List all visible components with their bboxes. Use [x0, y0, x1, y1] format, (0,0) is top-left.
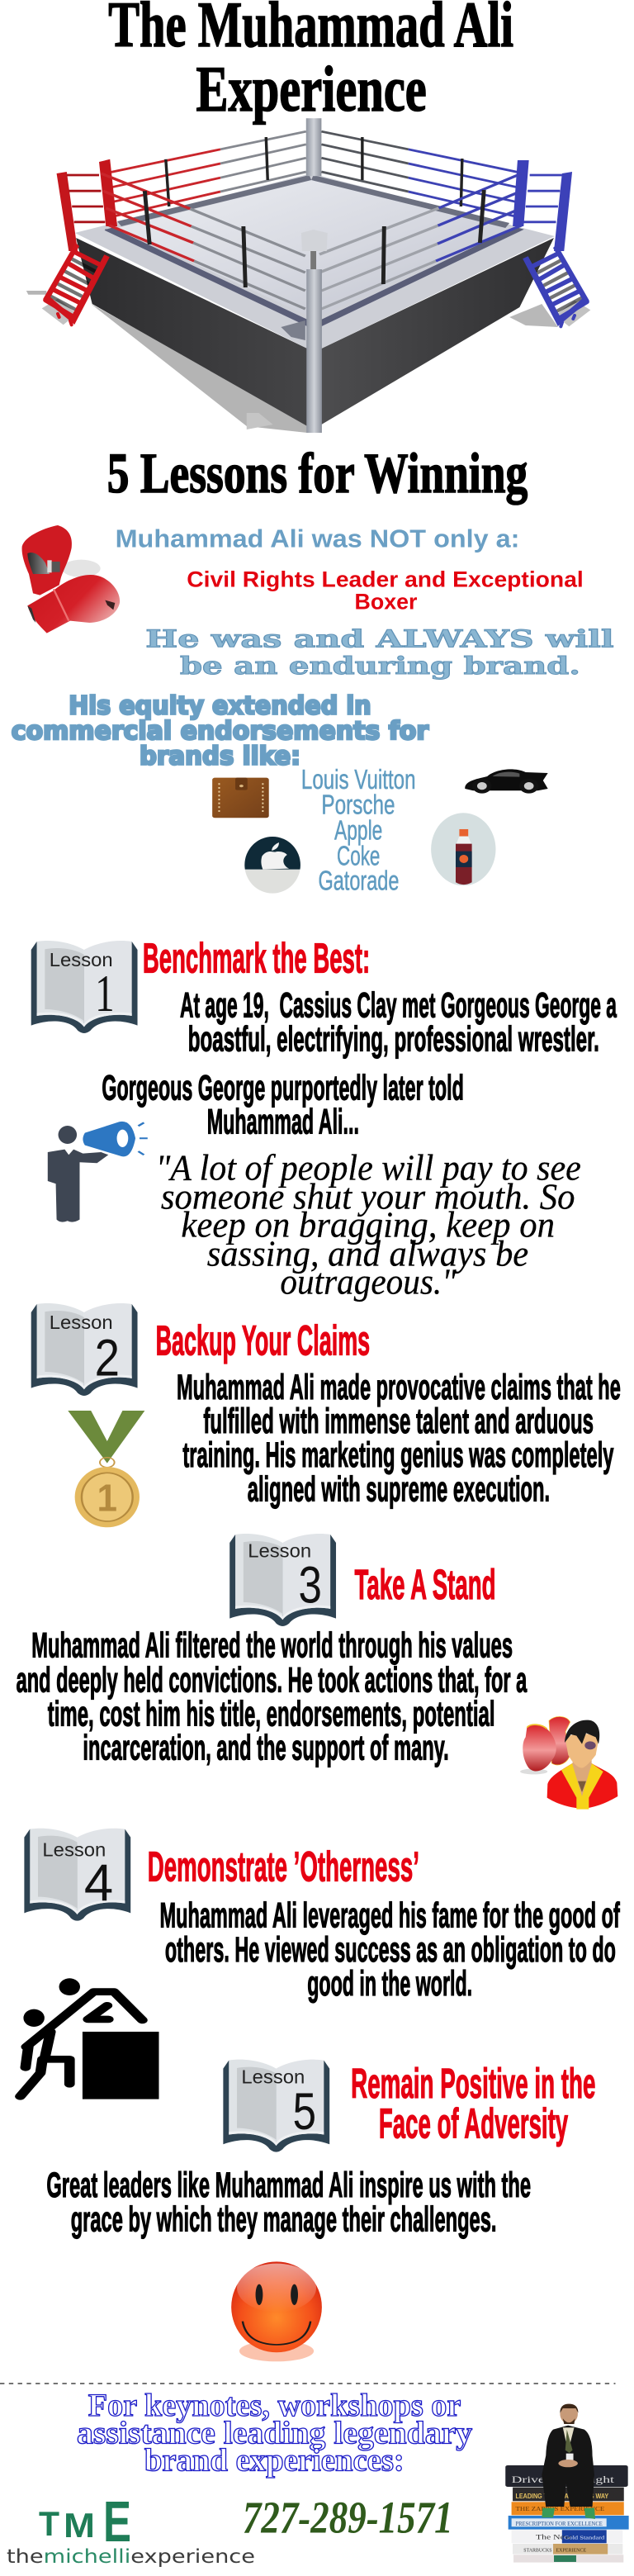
- logo: the michelli experience: the michelli experience: [7, 2546, 255, 2568]
- logo: the michelli experience: [7, 2489, 255, 2568]
- quote: [156, 1147, 581, 1302]
- text: equity: commercial endorsements for: [12, 716, 429, 745]
- icon: wallet: [212, 778, 269, 818]
- icon: lesson 1 book: 1: [95, 965, 115, 1022]
- front post: [301, 230, 328, 251]
- illustration: boxing ring: [26, 118, 572, 433]
- icon: cola bottle: [431, 813, 495, 885]
- text: enduring brand: He was and ALWAYS will: [145, 625, 614, 652]
- icon: lesson 5 book: Lesson: [241, 2066, 305, 2088]
- section: lesson 1: [31, 935, 617, 1396]
- text: lead-in: [102, 1068, 464, 1141]
- icon: gold medal: 1: [97, 1477, 117, 1520]
- text: call to action: brand experiences:: [144, 2442, 405, 2478]
- photo: author on book stack: Gold Standard: [564, 2535, 605, 2540]
- icon: lesson 3 book: [229, 1534, 336, 1626]
- text: lesson 5: [46, 2166, 531, 2239]
- icon: gold medal: [68, 1411, 144, 1527]
- quote: outrageous.": [280, 1262, 457, 1302]
- photo: author on book stack: Driven to Delight: [512, 2474, 615, 2485]
- icon: lesson 1 book: [31, 941, 138, 1033]
- icon: apple: [244, 837, 300, 894]
- logo: the michelli experience: T: [39, 2504, 59, 2543]
- photo: author on book stack: STARBUCKS: [523, 2547, 552, 2553]
- list: brands: Porsche: [321, 789, 395, 820]
- text: enduring brand: be an enduring brand.: [180, 652, 580, 680]
- text: call to action: [77, 2387, 472, 2478]
- phone number: 727-289-1571: [243, 2492, 453, 2543]
- icon: lesson 4 book: Lesson: [42, 1839, 106, 1861]
- photo: author on book stack: [505, 2404, 629, 2563]
- text: civil rights leader: Boxer: [355, 590, 417, 614]
- text: civil rights leader: [187, 568, 584, 614]
- corner posts: [57, 172, 78, 251]
- icon: lesson 2 book: Lesson: [50, 1312, 113, 1334]
- section: closing and contact: [0, 2166, 629, 2563]
- icon: boxing gloves: [22, 525, 120, 633]
- icon: red steps: [42, 244, 109, 325]
- text: lead-in: Muhammad Ali...: [207, 1102, 359, 1141]
- heading: remain positive: [351, 2061, 595, 2147]
- front ropes: [101, 173, 522, 309]
- text: lesson 4: [159, 1895, 620, 2004]
- icon: lesson 4 book: 4: [84, 1853, 113, 1912]
- icon: blue steps: [523, 245, 590, 326]
- photo: author on book stack: The New: [536, 2534, 572, 2541]
- back ropes: [111, 131, 518, 216]
- text: equity: [12, 690, 429, 771]
- section: title and boxing ring: [26, 0, 590, 505]
- icon: lesson 3 book: Lesson: [248, 1541, 311, 1562]
- ring apron and canvas: [75, 173, 555, 349]
- list: brands: Gatorade: [318, 865, 399, 895]
- back post: [306, 118, 321, 176]
- icon: smiley: [231, 2261, 322, 2361]
- text: lesson 2: [177, 1368, 621, 1509]
- icon: boxer: [520, 1716, 617, 1810]
- text: lesson 1 story: [180, 985, 617, 1059]
- text: lesson 3: [17, 1625, 528, 1767]
- icon: lesson 5 book: 5: [293, 2082, 316, 2140]
- section: lesson 4 and 5: [20, 1829, 620, 2152]
- icon: lesson 5 book: [223, 2060, 329, 2152]
- logo: the michelli experience: E: [103, 2489, 131, 2554]
- list: brands: Coke: [337, 840, 380, 871]
- text: enduring brand: [145, 625, 614, 680]
- section: brand intro: [12, 525, 614, 895]
- section: brand intro: Louis Vuitton: [301, 764, 416, 795]
- icon: lesson 2 book: [31, 1303, 138, 1396]
- photo: author on book stack: EXPERIENCE: [556, 2547, 586, 2553]
- text: equity: His equity extended in: [69, 690, 371, 719]
- icon: helping hand climbing: [20, 1978, 158, 2099]
- icon: sports car: [465, 769, 548, 794]
- ring skirt: [76, 238, 307, 426]
- icon: person with megaphone: [48, 1122, 148, 1222]
- icon: lesson 2 book: 2: [95, 1328, 120, 1387]
- text: equity: brands like:: [140, 742, 300, 771]
- icon: lesson 3 book: 3: [298, 1555, 322, 1614]
- icon: lesson 4 book: [24, 1829, 130, 1921]
- icon: lesson 1 book: Lesson: [50, 950, 113, 971]
- list: brands: [301, 764, 416, 895]
- photo: author on book stack: THE ZAPPOS EXPERIENCE: [515, 2506, 605, 2512]
- list: brands: Apple: [334, 814, 382, 846]
- title: Experience: [196, 53, 427, 125]
- title: [108, 0, 513, 125]
- logo: the michelli experience: M: [64, 2506, 95, 2545]
- section: lesson 2 and 3: [17, 1317, 621, 1767]
